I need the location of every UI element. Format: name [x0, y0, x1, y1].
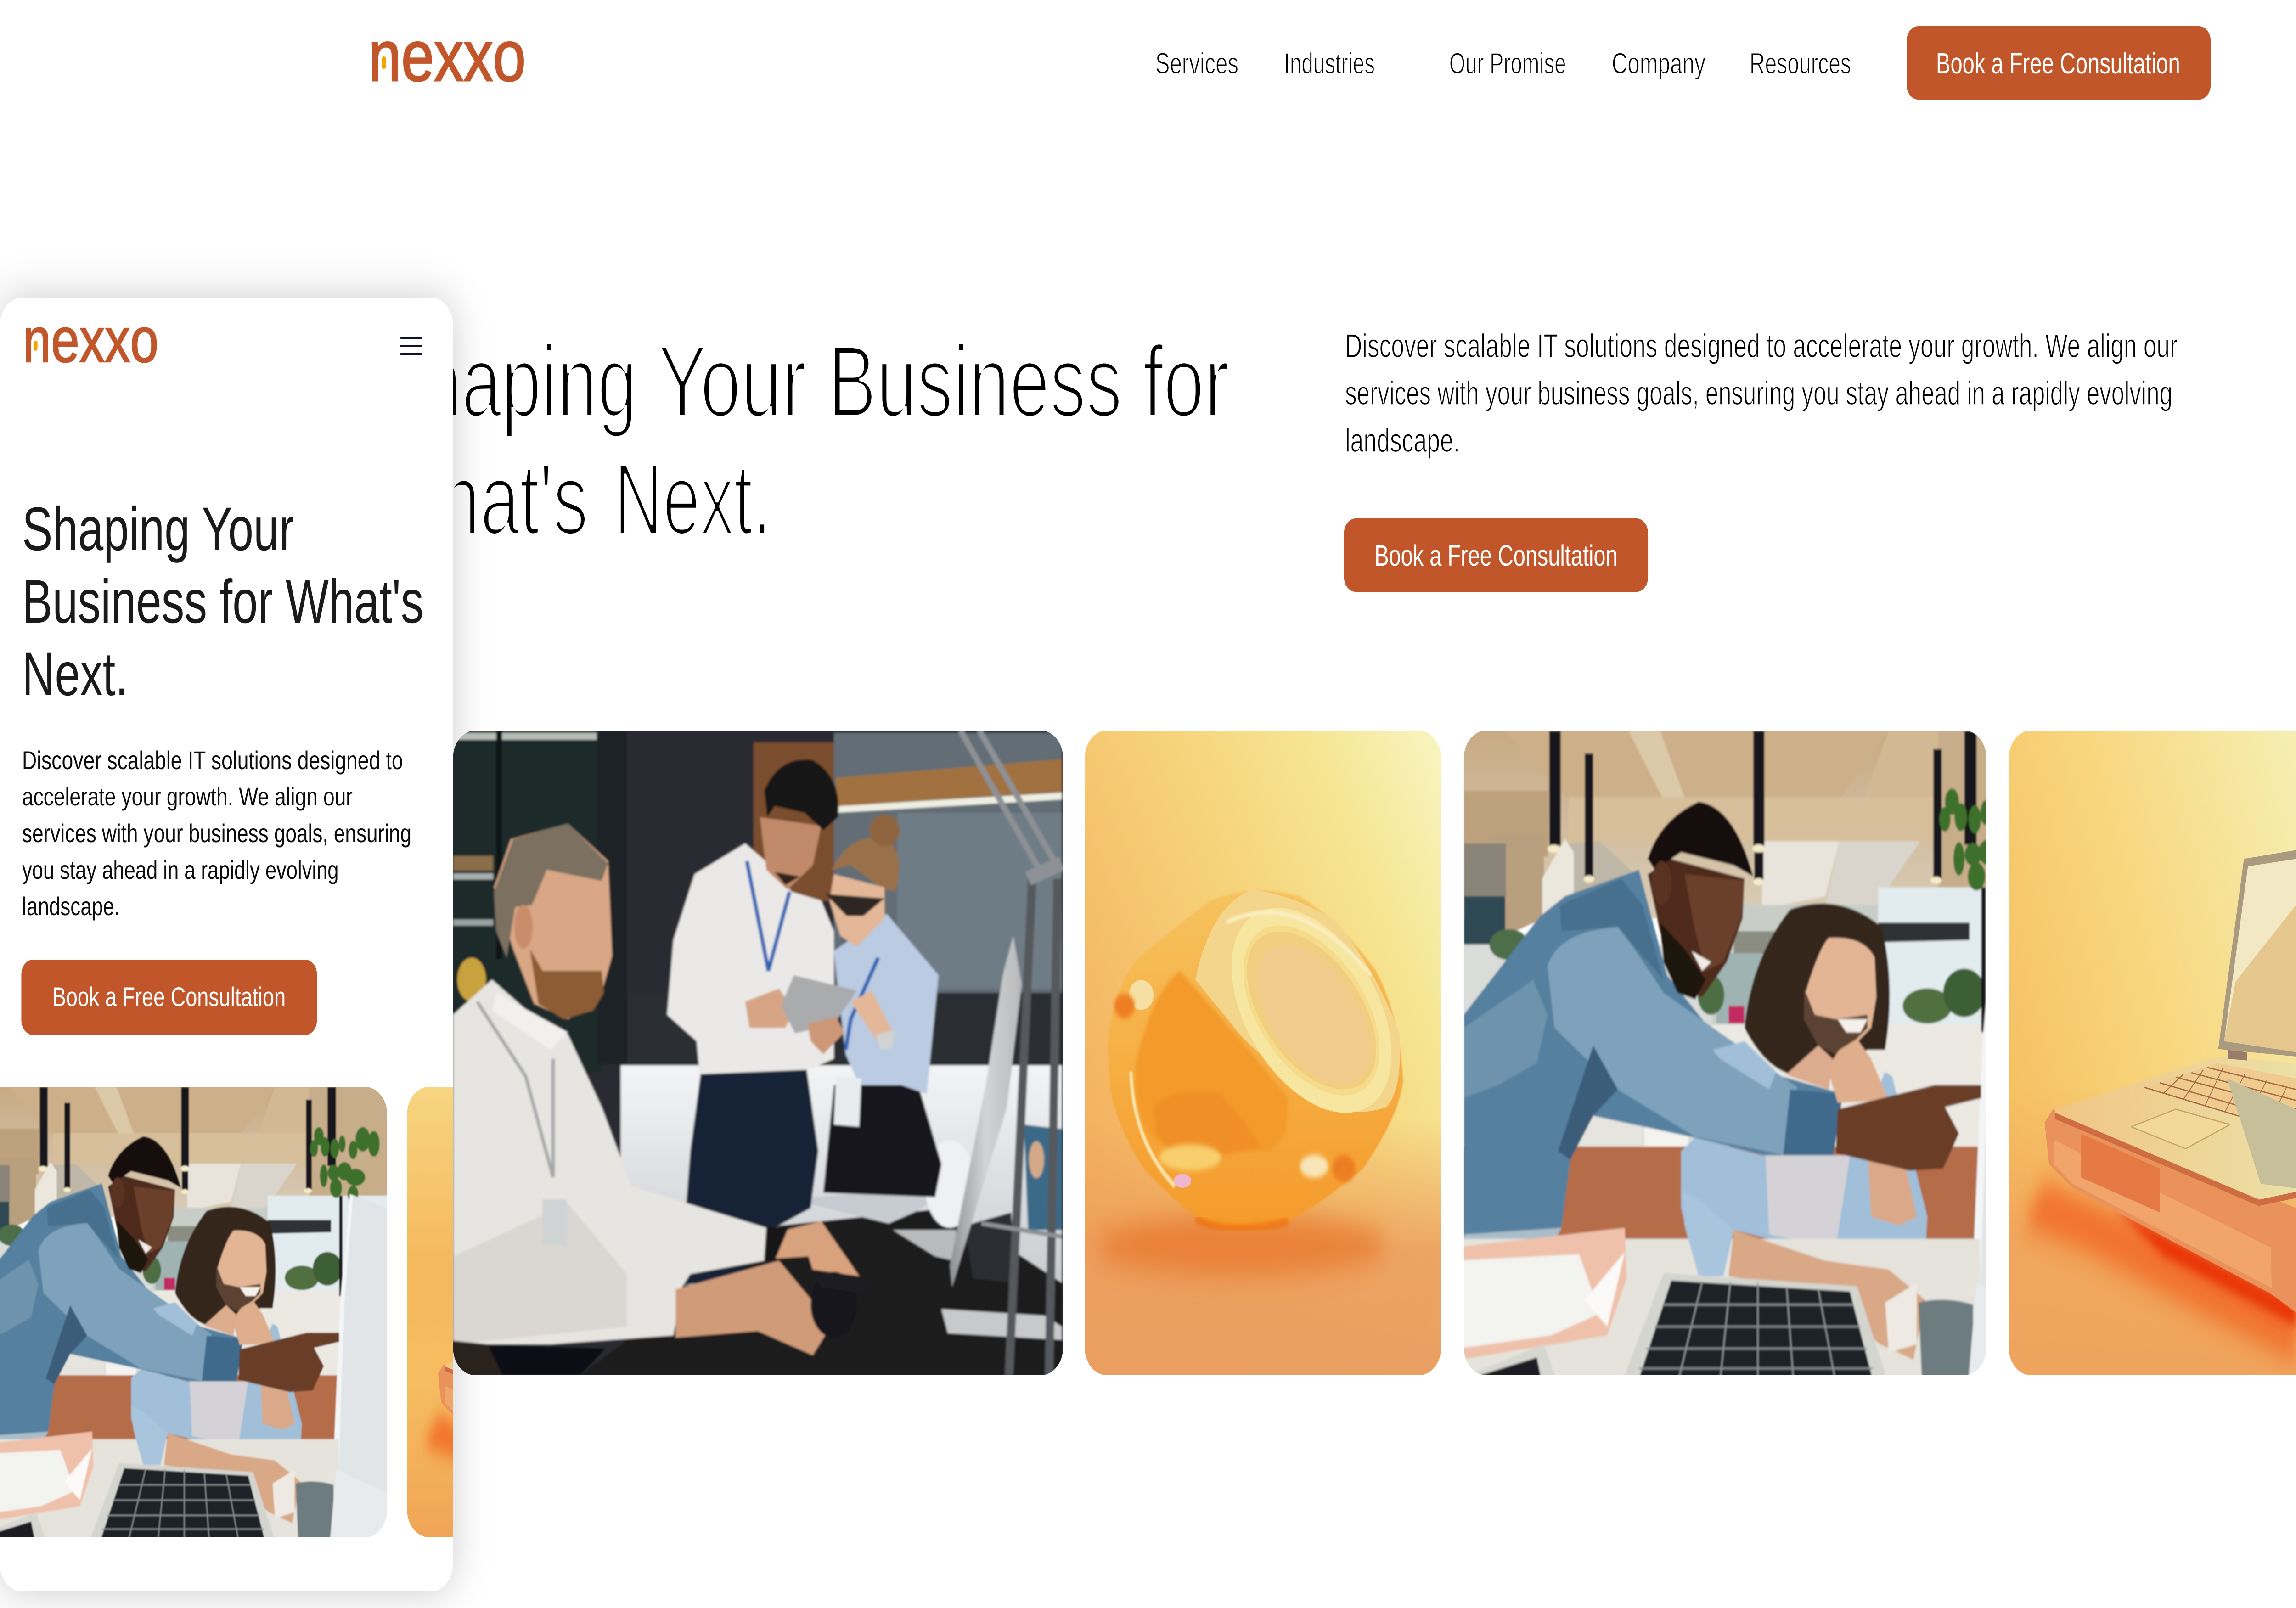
icon: hamburger menu — [400, 337, 422, 355]
mobile description: accelerate your growth. We align our — [22, 782, 353, 811]
seated man — [453, 824, 870, 1375]
hero button: Book a Free Consultation — [1344, 518, 1648, 592]
mobile description: services with your business goals, ensuring — [22, 819, 411, 848]
mobile logo: nexxo — [23, 305, 158, 376]
nav link: Our Promise: Our Promise — [1449, 48, 1566, 80]
image card: amber glass orb — [1082, 725, 1446, 1384]
desktop navigation — [1155, 48, 1851, 80]
phone panel drop shadow — [0, 298, 453, 1591]
mobile heading: Shaping Your — [22, 495, 294, 563]
mobile description: Discover scalable IT solutions designed to — [22, 746, 403, 775]
hero description: services with your business goals, ensuring you stay ahead in a rapidly evolving — [1345, 375, 2172, 411]
hero heading: Business — [828, 325, 1122, 438]
photo card: two colleagues reviewing work — [1452, 725, 2058, 1388]
desktop logo: nexxo — [368, 16, 526, 96]
mobile button: Book a Free Consultation — [21, 960, 317, 1035]
hero description — [1345, 327, 2178, 459]
nav button: Book a Free Consultation — [1907, 26, 2211, 100]
hero heading: Your — [658, 325, 806, 438]
photo card: office team at computer — [441, 729, 1075, 1379]
hero heading — [374, 325, 1229, 556]
nav button: Book a Free Consultation: Book a Free Consultation — [1936, 48, 2180, 80]
woman colleague — [823, 815, 941, 1197]
mobile photo card: two colleagues reviewing work — [0, 1083, 392, 1543]
hero heading: Next. — [614, 443, 771, 556]
nav link: Company: Company — [1612, 48, 1705, 80]
mobile image card: translucent laptop — [407, 1087, 614, 1541]
mobile phone panel — [0, 298, 614, 1591]
image card: translucent laptop — [2009, 731, 2296, 1375]
nav link: Resources: Resources — [1750, 48, 1851, 80]
hero heading: for — [1143, 325, 1229, 438]
mobile heading: Next. — [22, 640, 128, 708]
mobile heading — [22, 495, 423, 708]
hero button: Book a Free Consultation: Book a Free Consultation — [1374, 540, 1618, 572]
mobile description — [22, 746, 411, 921]
mobile description: you stay ahead in a rapidly evolving — [22, 855, 339, 884]
hero description: Discover scalable IT solutions designed to accelerate your growth. We align our — [1345, 327, 2178, 364]
nav link: Industries: Industries — [1284, 48, 1375, 80]
mobile description: landscape. — [22, 892, 120, 921]
mobile heading: Business for What's — [22, 567, 423, 636]
standing colleague — [667, 759, 838, 1285]
mobile button: Book a Free Consultation: Book a Free Consultation — [52, 982, 286, 1012]
hero heading: Shaping — [374, 325, 637, 438]
hero heading: What's — [374, 443, 588, 556]
hero description: landscape. — [1345, 422, 1460, 459]
nav link: Services: Services — [1155, 48, 1238, 80]
